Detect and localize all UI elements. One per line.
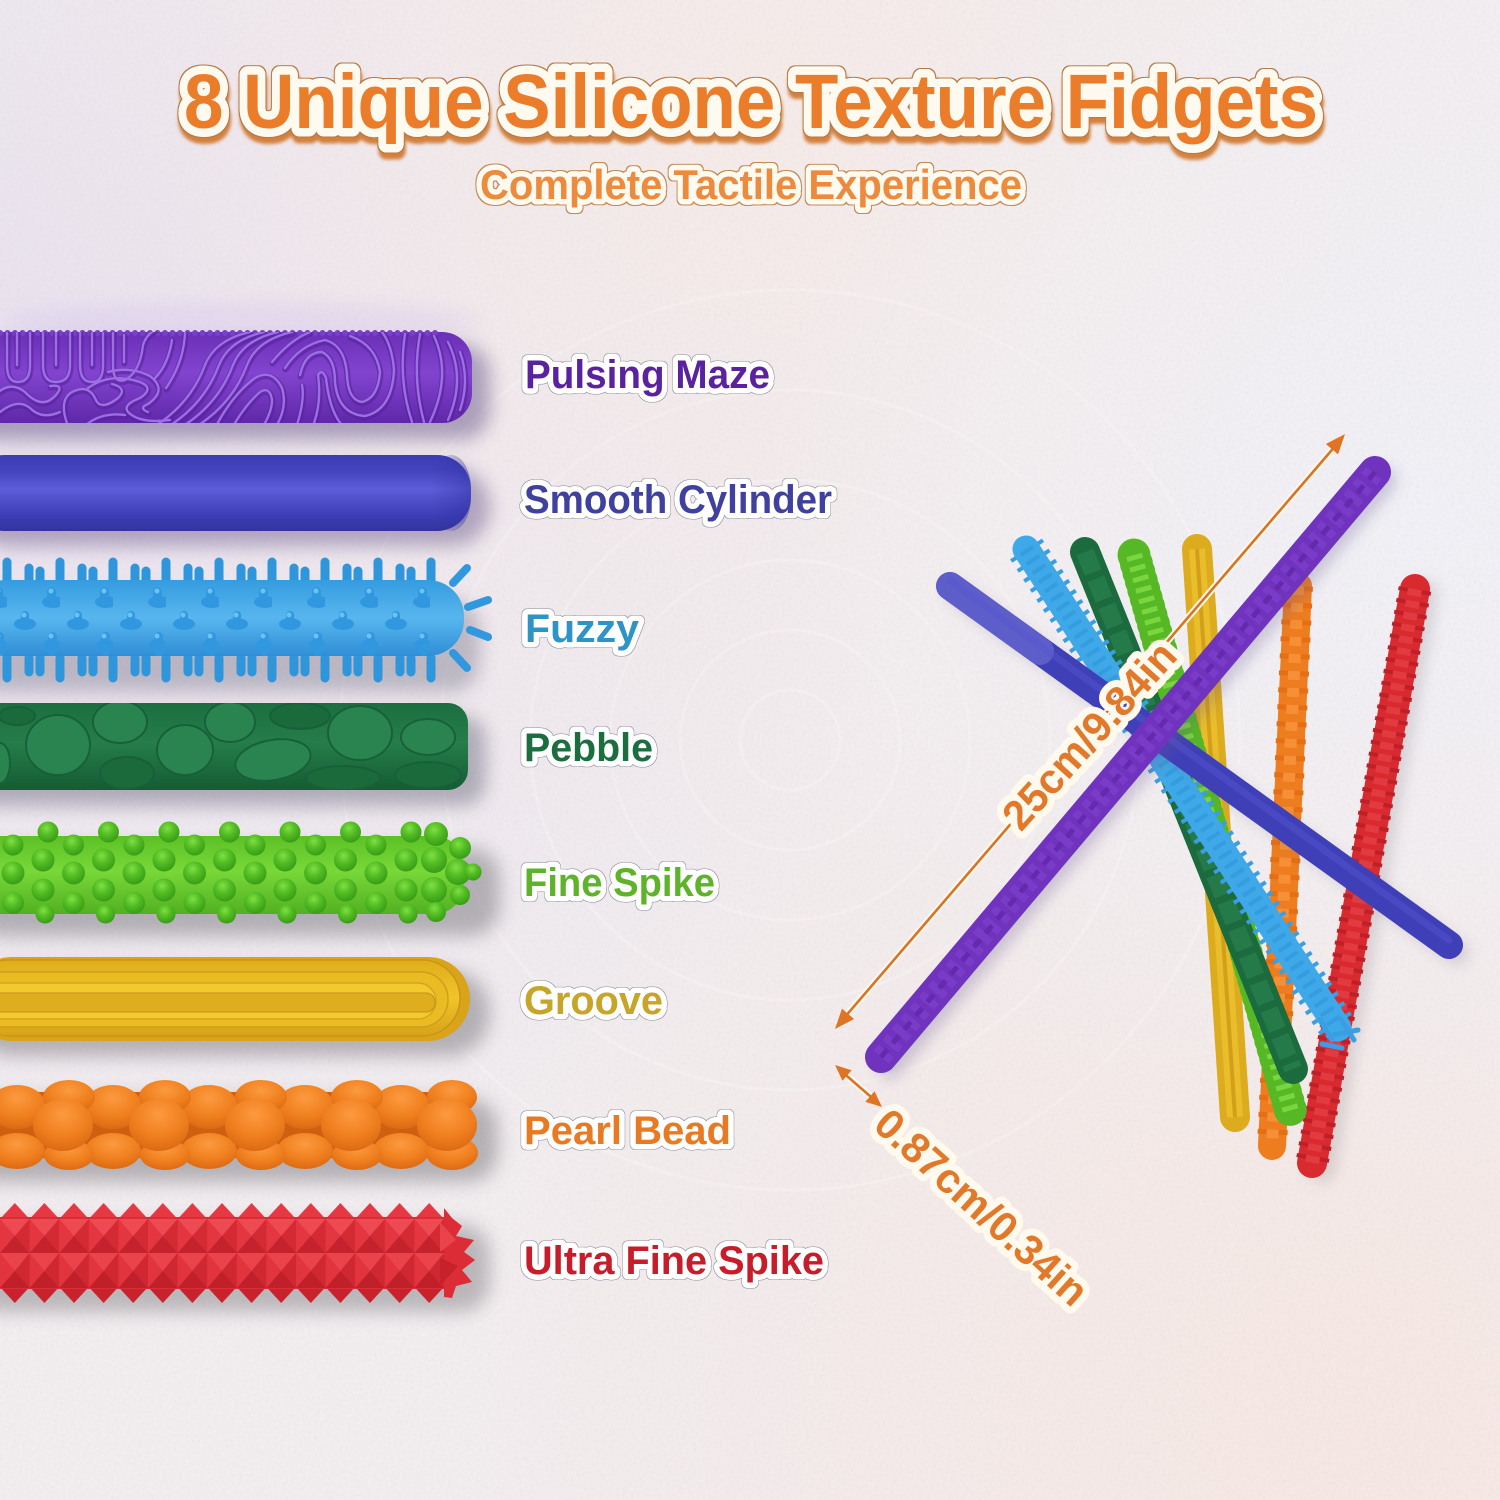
label: Pulsing Maze: Pulsing Maze bbox=[525, 353, 770, 397]
label: Fuzzy: Fuzzy bbox=[525, 607, 640, 651]
rod: ultra fine spike bbox=[0, 1203, 490, 1312]
stick: lime bbox=[1134, 555, 1291, 1112]
stick: orange bbox=[1272, 586, 1298, 1146]
subtitle: Complete Tactile Experience bbox=[480, 161, 1022, 208]
rod: fuzzy bbox=[0, 552, 488, 692]
stick: yellow bbox=[1197, 549, 1235, 1117]
stick: smooth violet bbox=[950, 581, 1457, 953]
label: Pearl Bead: Pearl Bead bbox=[524, 1109, 731, 1153]
stick: fuzzy blue bbox=[1026, 549, 1358, 1048]
stick: red bbox=[1312, 589, 1424, 1168]
label: Ultra Fine Spike: Ultra Fine Spike bbox=[524, 1239, 824, 1283]
rod: pulsing maze bbox=[0, 330, 490, 440]
label: length: 25cm/9.84in bbox=[993, 632, 1186, 839]
rod: fine spike bbox=[0, 820, 500, 936]
label: Groove: Groove bbox=[524, 979, 663, 1023]
rod: pearl bead bbox=[0, 1080, 498, 1182]
stick: textured purple bbox=[881, 472, 1384, 1066]
label: Smooth Cylinder: Smooth Cylinder bbox=[524, 478, 832, 522]
sticks: crossed pile bbox=[881, 472, 1457, 1168]
label: Fine Spike: Fine Spike bbox=[524, 861, 715, 905]
rod: pebble bbox=[0, 701, 486, 806]
label: Pebble: Pebble bbox=[524, 726, 653, 770]
label: diameter: 0.87cm/0.34in bbox=[866, 1099, 1098, 1315]
title: 8 Unique Silicone Texture Fidgets bbox=[184, 59, 1318, 145]
arrow: diameter dimension bbox=[830, 1060, 887, 1112]
stick: dark green bbox=[1085, 552, 1293, 1069]
arrow: length dimension bbox=[829, 429, 1351, 1034]
rod: smooth cylinder bbox=[0, 455, 490, 546]
rod: groove bbox=[0, 957, 490, 1056]
